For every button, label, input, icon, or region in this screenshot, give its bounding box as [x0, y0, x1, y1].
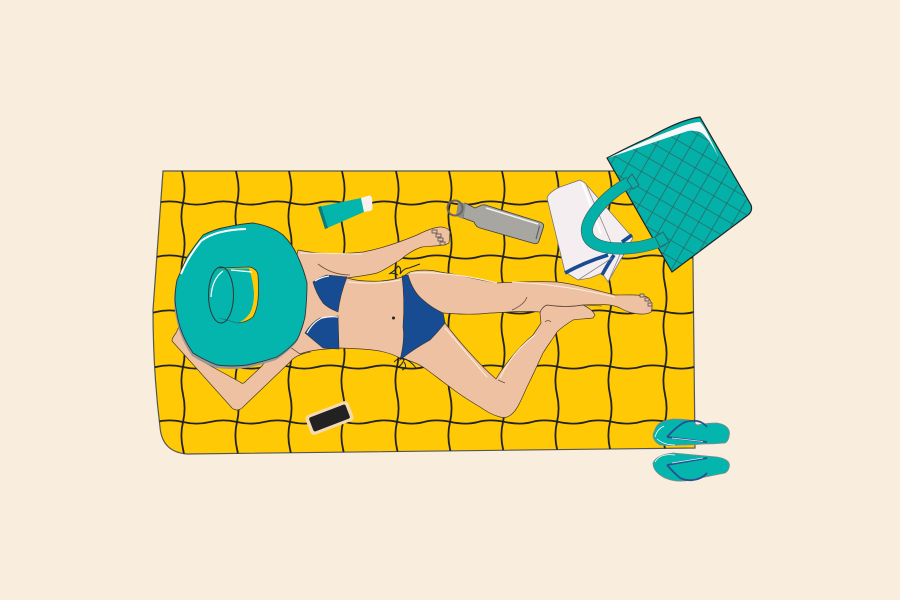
hat shadow	[174, 226, 306, 369]
icon: sunscreen tube	[318, 196, 372, 229]
hat crown	[208, 268, 254, 323]
panel: yellow beach towel	[152, 170, 696, 455]
handle tab bottom	[655, 232, 669, 247]
icon: phone	[304, 400, 355, 436]
hat brim	[175, 223, 307, 366]
hat crown yellow crescent	[220, 267, 258, 323]
crown highlights	[211, 270, 252, 297]
icon: teal sun hat	[174, 223, 307, 369]
icon: teal tote bag	[587, 117, 760, 280]
bikini bottom	[400, 275, 445, 360]
figure: sunbathing woman	[172, 227, 652, 418]
icon: bottom flip-flop	[653, 453, 730, 481]
toenail	[646, 307, 651, 311]
icon: folded white towel	[547, 180, 633, 282]
icon: top flip-flop	[653, 419, 730, 446]
skin highlights	[300, 253, 615, 378]
bikini top	[313, 275, 347, 312]
skin creases	[318, 264, 602, 383]
belly button	[392, 316, 395, 320]
bag highlight	[608, 122, 719, 158]
bag handle	[587, 182, 664, 249]
bent leg	[400, 305, 595, 418]
bag quilting	[611, 130, 748, 270]
fingers and toes	[432, 230, 652, 306]
hat highlight	[181, 229, 246, 274]
handle tab top	[627, 174, 639, 189]
bikini ties	[389, 264, 420, 370]
lower arm	[172, 322, 310, 410]
icon: water bottle	[448, 200, 544, 244]
crown inner ellipse	[208, 267, 234, 323]
torso, upper arm and straight leg	[280, 227, 652, 358]
